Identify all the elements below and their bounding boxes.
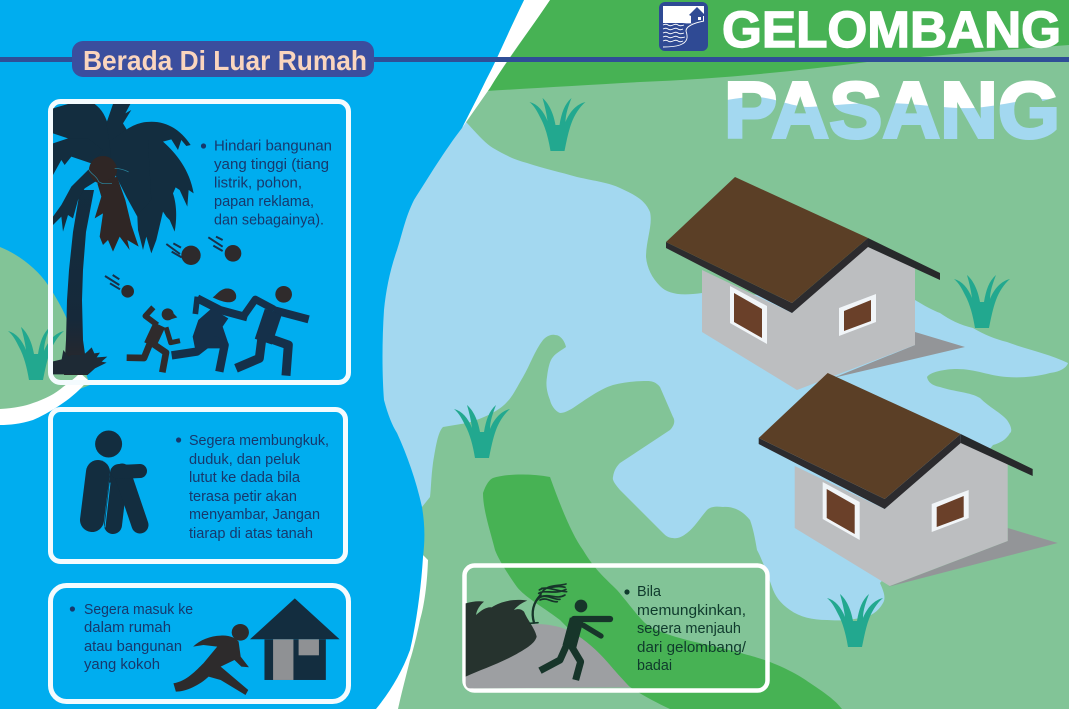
title: pasang: PASANG — [724, 66, 1060, 154]
bullet text: move away: badai — [637, 657, 672, 674]
icon: falling coconuts — [105, 237, 241, 298]
bullet text: crouch: terasa petir akan — [189, 488, 297, 505]
bullet text: go indoors — [70, 601, 193, 673]
panel: move away from waves — [464, 566, 768, 690]
bullet text: move away: dari gelombang/ — [637, 639, 747, 656]
header rule — [0, 57, 1069, 62]
panel: crouch during lightning — [50, 410, 346, 562]
icon: running family — [127, 286, 309, 376]
bullet text: crouch: lutut ke dada bila — [189, 469, 301, 486]
logo icon: house by the sea — [659, 2, 708, 51]
bullet text: move away: Bila — [637, 583, 662, 600]
icon: wave, road, bent tree and running person — [466, 584, 630, 688]
bullet text: avoid tall structures: dan sebagainya). — [214, 212, 324, 228]
background: top green band — [487, 0, 1069, 91]
bullet text: crouch: duduk, dan peluk — [189, 451, 300, 468]
bullet text: go indoors: atau bangunan — [84, 638, 182, 655]
icon: person running into house — [173, 598, 340, 695]
background: white stripes — [370, 0, 550, 709]
bullet text: avoid tall structures — [201, 138, 332, 228]
panel: avoid tall structures — [50, 102, 348, 382]
grass: bottom — [827, 594, 883, 647]
bullet text: avoid tall structures: Hindari bangunan — [214, 138, 332, 154]
bullet text: go indoors: dalam rumah — [84, 619, 171, 636]
grass: top — [530, 98, 586, 151]
bullet text: move away: memungkinkan, — [637, 602, 746, 619]
panel: go indoors — [50, 586, 348, 702]
icon: crouching person — [92, 430, 140, 527]
bullet text: crouch: tiarap di atas tanah — [189, 525, 313, 542]
grass: left hill — [8, 327, 64, 380]
bullet text: avoid tall structures: papan reklama, — [214, 193, 314, 210]
house: upper — [666, 177, 965, 390]
grass: right — [954, 275, 1010, 328]
bullet text: move away: segera menjauh — [637, 620, 741, 637]
background: flood water — [340, 100, 1068, 620]
left hill — [0, 247, 90, 420]
bullet text: crouch: Segera membungkuk, — [189, 432, 329, 449]
bullet text: crouch: menyambar, Jangan — [189, 506, 320, 523]
bullet text: crouch — [176, 432, 329, 542]
background: blue panel — [0, 0, 524, 709]
white crescent — [0, 373, 88, 425]
section heading pill: Berada Di Luar Rumah — [83, 45, 367, 76]
icon: palm tree — [52, 104, 194, 375]
background: green path — [483, 474, 842, 709]
bullet text: move away — [624, 583, 747, 674]
bullet text: go indoors: Segera masuk ke — [84, 601, 193, 618]
title: gelombang: GELOMBANG — [722, 1, 1061, 58]
bullet text: go indoors: yang kokoh — [84, 656, 160, 673]
grass: middle — [454, 405, 510, 458]
bullet text: avoid tall structures: listrik, pohon, — [214, 174, 302, 192]
bullet text: avoid tall structures: yang tinggi (tiang — [214, 156, 329, 173]
house: lower — [759, 373, 1058, 587]
